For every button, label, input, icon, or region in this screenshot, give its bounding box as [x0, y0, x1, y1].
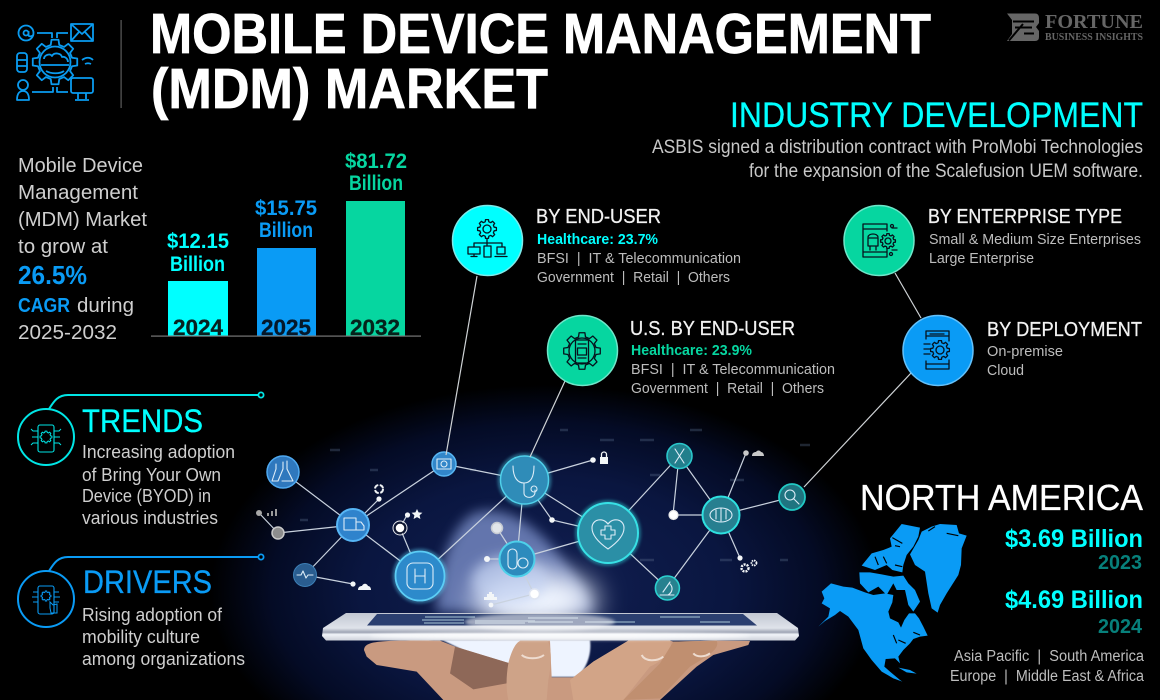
text: north america values: NORTH AMERICA	[860, 477, 1143, 518]
text: market growth summary: CAGR	[18, 295, 70, 317]
text: drivers: DRIVERS	[83, 564, 212, 600]
bar 2025	[255, 196, 317, 340]
satellite dots and small icons	[256, 450, 764, 607]
panel: by end-user	[452, 206, 741, 286]
node: magnifier	[779, 484, 805, 510]
bar 2032	[345, 149, 407, 340]
text: market growth summary: 2025-2032	[18, 322, 117, 344]
icon: android phone with gear	[844, 206, 914, 276]
bar 2024	[167, 229, 229, 340]
text: deployment details	[987, 319, 1142, 379]
node: flask	[267, 456, 299, 488]
title: MOBILE DEVICE MANAGEMENT	[150, 2, 931, 66]
text: U.S. end-user details: Government | Retail | Others	[631, 380, 824, 397]
panel: by deployment	[903, 316, 1142, 386]
text: enterprise type details: Large Enterprise	[929, 250, 1034, 267]
text: deployment details: On-premise	[987, 343, 1063, 360]
panel: north america	[818, 477, 1144, 685]
node: camera	[432, 452, 456, 476]
text: deployment details: Cloud	[987, 362, 1024, 379]
text: trends: Increasing adoption	[82, 442, 235, 462]
node: ambulance	[337, 509, 369, 541]
bar 2024: $12.15	[167, 229, 229, 253]
logo: Fortune Business Insights: BUSINESS INSIGHTS	[1045, 32, 1143, 43]
text: north america values	[860, 477, 1144, 685]
text: trends: Device (BYOD) in	[82, 486, 211, 506]
text: north america values: Europe | Middle East & Africa	[950, 668, 1144, 685]
text: market growth summary	[18, 155, 147, 344]
network connector lines	[259, 453, 792, 605]
title: (MDM) MARKET	[151, 57, 548, 121]
text: by end-user details: BY END-USER	[536, 206, 661, 228]
text: north america values: Asia Pacific | South America	[954, 648, 1144, 665]
text: enterprise type details: Small & Medium Size Enterprises	[929, 231, 1141, 248]
text: enterprise type details: BY ENTERPRISE TYPE	[928, 206, 1122, 228]
tablet	[322, 613, 799, 640]
text: drivers: among organizations	[82, 649, 245, 669]
text: north america values: 2023	[1098, 552, 1142, 574]
text: by end-user details: Government | Retail | Others	[537, 269, 730, 286]
text: trends: various industries	[82, 508, 218, 528]
node: hospital	[394, 550, 446, 602]
text: north america values: 2024	[1098, 616, 1143, 638]
photo: glowing network above tablet held in hand	[205, 380, 885, 700]
shirt cuff behind hand	[442, 640, 590, 677]
icon: phone with gear	[903, 316, 973, 386]
icon: gear with device	[548, 316, 618, 386]
bar 2024: 2024	[173, 315, 224, 340]
connector lines to segment circles	[446, 273, 921, 487]
bar 2032: $81.72	[345, 149, 407, 173]
icon: cloud and device network logo	[17, 24, 93, 100]
bar 2032: 2032	[350, 315, 400, 340]
text: by end-user details: BFSI | IT & Telecommunication	[537, 250, 741, 267]
text: market growth summary: to grow at	[18, 236, 108, 258]
text: north america values: $3.69 Billion	[1005, 525, 1143, 553]
bar 2025: $15.75	[255, 196, 317, 220]
text: by end-user details	[536, 206, 741, 286]
network nodes	[256, 444, 805, 607]
text: U.S. end-user details: BFSI | IT & Telecommunication	[631, 361, 835, 378]
icon: phone with touch in ring	[18, 554, 264, 627]
panel: trends	[18, 392, 264, 528]
panel: industry development	[652, 96, 1143, 182]
map: North America	[818, 524, 967, 682]
panel: by enterprise type	[844, 206, 1141, 276]
text: market growth summary: 26.5%	[18, 260, 87, 290]
divider	[120, 20, 122, 108]
text: market growth summary: (MDM) Market	[18, 209, 147, 231]
node: brain	[702, 496, 740, 534]
node: stethoscope	[500, 455, 550, 505]
text: U.S. end-user details: U.S. BY END-USER	[630, 318, 795, 340]
icon: gear over devices	[452, 206, 522, 276]
node: pill	[500, 542, 534, 576]
bar 2025: 2025	[261, 315, 311, 340]
icon: phone with gear in ring	[18, 392, 264, 465]
bar 2032: Billion	[349, 171, 403, 195]
text: drivers: mobility culture	[82, 627, 200, 647]
bar 2025: Billion	[259, 218, 313, 242]
text: drivers	[82, 564, 245, 669]
text: market growth summary: Management	[18, 182, 138, 204]
text: trends: of Bring Your Own	[82, 465, 221, 485]
text: north america values: $4.69 Billion	[1005, 586, 1143, 614]
title	[150, 2, 931, 121]
panel: U.S. by end-user	[548, 316, 835, 397]
text: U.S. end-user details: Healthcare: 23.9%	[631, 343, 752, 359]
hand	[364, 641, 750, 700]
node: microscope	[655, 576, 679, 600]
text: enterprise type details	[928, 206, 1141, 267]
text: trends	[82, 403, 235, 528]
logo: Fortune Business Insights	[1007, 11, 1143, 43]
bar chart: market size	[151, 149, 421, 340]
text: market growth summary: during	[77, 295, 134, 317]
bar 2024: Billion	[170, 252, 225, 276]
node: heart	[577, 502, 639, 564]
node: dna	[667, 444, 692, 468]
panel: drivers	[18, 554, 264, 669]
text: drivers: Rising adoption of	[82, 605, 223, 625]
text: market growth summary: Mobile Device	[18, 155, 143, 177]
logo: Fortune Business Insights: FORTUNE	[1045, 11, 1143, 33]
text: U.S. end-user details	[630, 318, 835, 397]
text: deployment details: BY DEPLOYMENT	[987, 319, 1142, 341]
text: by end-user details: Healthcare: 23.7%	[537, 232, 658, 248]
text: trends: TRENDS	[82, 403, 203, 439]
node: heart monitor	[294, 564, 316, 586]
